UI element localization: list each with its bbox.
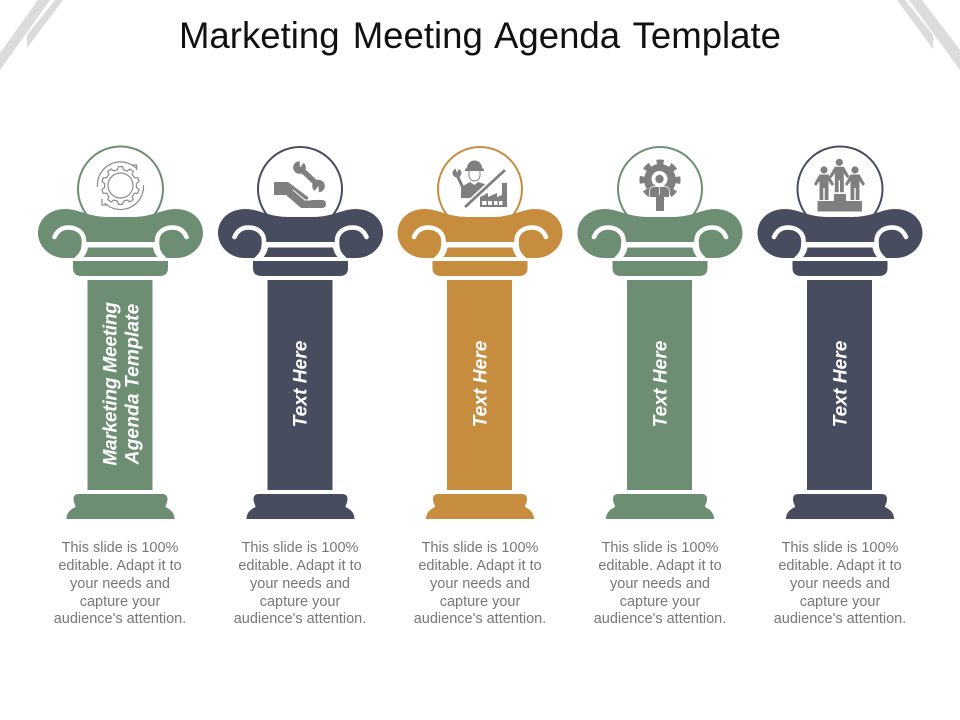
title: Marketing Meeting Agenda Template — [179, 15, 781, 56]
pillar label 2: Text Here — [290, 340, 312, 427]
pillar 3: gold — [398, 147, 562, 627]
pillar label 1: Agenda Template — [122, 303, 144, 465]
description 4: audience's attention. — [594, 611, 726, 627]
corner decoration: top left — [0, 0, 63, 70]
description 4: editable. Adapt it to — [598, 558, 722, 574]
description 3: capture your — [440, 594, 520, 610]
pillar body 4 — [578, 209, 742, 519]
description 5: editable. Adapt it to — [778, 558, 902, 574]
icon circle 3 — [438, 147, 522, 231]
description 2: audience's attention. — [234, 611, 366, 627]
description 2: editable. Adapt it to — [238, 558, 362, 574]
icon: gear with businessperson — [642, 162, 678, 211]
icon circle 1 — [78, 146, 163, 232]
icon: people on podium — [814, 159, 865, 212]
description 3: audience's attention. — [414, 611, 546, 627]
description 2: your needs and — [250, 576, 350, 592]
description 4: This slide is 100% — [602, 540, 719, 556]
pillar label 4: Text Here — [650, 340, 672, 427]
icon circle 4 — [618, 147, 702, 231]
pillar label 5: Text Here — [830, 340, 852, 427]
description 4: your needs and — [610, 576, 710, 592]
description 5: audience's attention. — [774, 611, 906, 627]
pillar 4: green — [578, 147, 742, 627]
description 1: audience's attention. — [54, 611, 186, 627]
icon: gear with cycle arrows — [97, 162, 144, 210]
icon: engineer and factory — [452, 161, 507, 209]
description 5: capture your — [800, 594, 880, 610]
pillar body 5 — [758, 209, 922, 519]
pillar body 1 — [38, 209, 203, 519]
icon: hand holding wrench — [274, 160, 326, 208]
corner decoration: top right — [897, 0, 960, 70]
pillar body 2 — [218, 209, 383, 519]
description 1: editable. Adapt it to — [58, 558, 182, 574]
pillar label 3: Text Here — [470, 340, 492, 427]
pillar label 1 — [100, 302, 144, 466]
icon circle 2 — [258, 147, 342, 231]
pillar 5: navy — [758, 146, 922, 627]
description 3: This slide is 100% — [422, 540, 539, 556]
description 2: capture your — [260, 594, 340, 610]
pillar 1: green — [38, 146, 203, 627]
description 1: This slide is 100% — [62, 540, 179, 556]
description 1: capture your — [80, 594, 160, 610]
description 2: This slide is 100% — [242, 540, 359, 556]
pillar label 1: Marketing Meeting — [100, 302, 122, 466]
icon circle 5 — [798, 146, 882, 232]
description 5: This slide is 100% — [782, 540, 899, 556]
pillar body 3 — [398, 209, 562, 519]
description 4: capture your — [620, 594, 700, 610]
description 3: your needs and — [430, 576, 530, 592]
description 3: editable. Adapt it to — [418, 558, 542, 574]
description 1: your needs and — [70, 576, 170, 592]
pillar 2: navy — [218, 147, 383, 627]
description 5: your needs and — [790, 576, 890, 592]
